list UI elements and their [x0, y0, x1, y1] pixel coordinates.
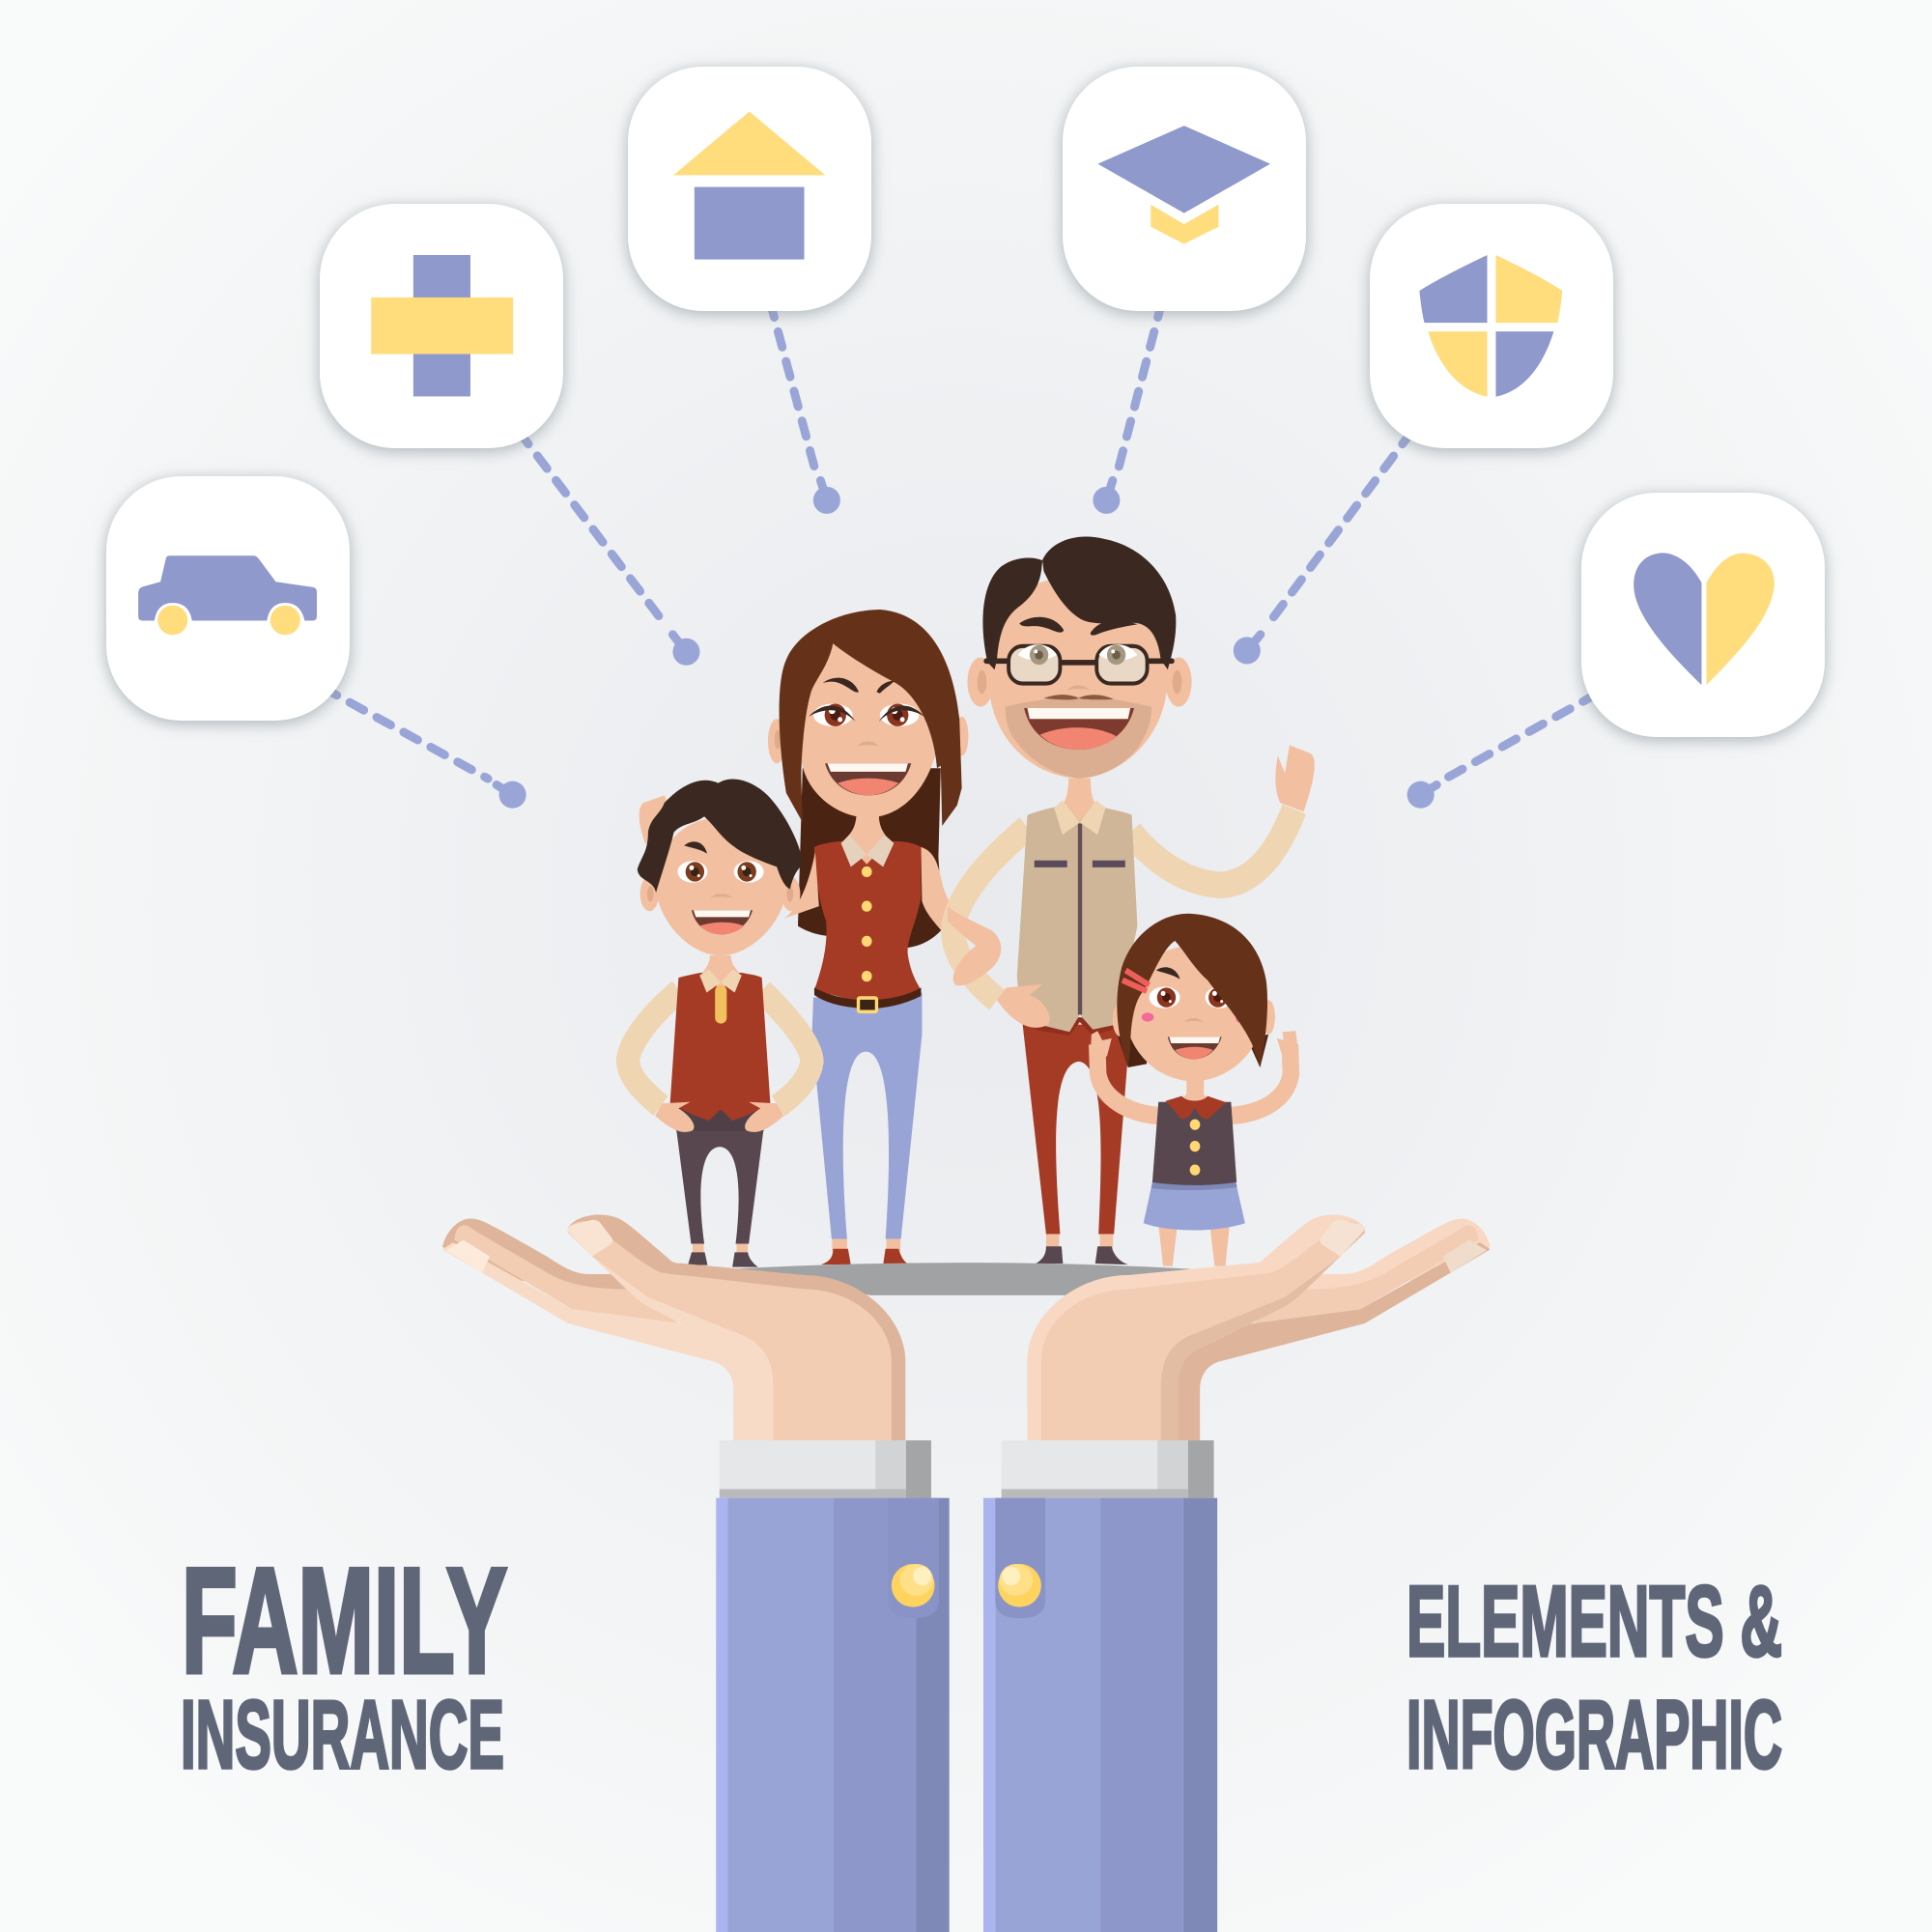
father	[948, 537, 1315, 1264]
left cuff	[720, 1440, 931, 1498]
button: left cuff	[892, 1564, 935, 1607]
platform	[731, 1263, 1191, 1295]
hand: mother's hand on father's arm	[948, 906, 1001, 985]
connector: health	[519, 431, 699, 666]
connector lines and dots	[323, 301, 1597, 809]
icon: heart	[1634, 553, 1775, 685]
left sleeve	[716, 1498, 950, 1932]
connector: education	[1093, 301, 1162, 514]
icon card: education	[1063, 67, 1306, 311]
title: Insurance: INSURANCE	[181, 1681, 504, 1789]
button: right cuff	[998, 1564, 1041, 1607]
title: Family: FAMILY	[182, 1537, 507, 1704]
icon: graduation cap	[1097, 126, 1270, 244]
connector: heart	[1407, 694, 1597, 809]
daughter	[1091, 914, 1298, 1266]
right cuff	[1002, 1440, 1214, 1498]
right hand	[1027, 1215, 1491, 1440]
icon: house	[673, 112, 825, 260]
son	[628, 780, 819, 1267]
mother	[768, 610, 968, 1264]
icon: medical cross	[371, 255, 513, 396]
icon card: house	[628, 67, 871, 311]
icon card: shield	[1370, 204, 1613, 448]
connector: car	[323, 688, 526, 809]
left hand	[442, 1215, 905, 1440]
right sleeve	[983, 1498, 1217, 1932]
icon: car	[138, 555, 317, 635]
icon card: health cross	[320, 204, 563, 448]
icon card: heart	[1581, 493, 1825, 737]
connector: shield	[1234, 431, 1412, 664]
hands and sleeves	[442, 1215, 1491, 1932]
family illustration	[628, 537, 1315, 1267]
icon: shield	[1419, 255, 1562, 397]
connector: house	[770, 301, 840, 514]
icon card: car	[106, 476, 350, 721]
